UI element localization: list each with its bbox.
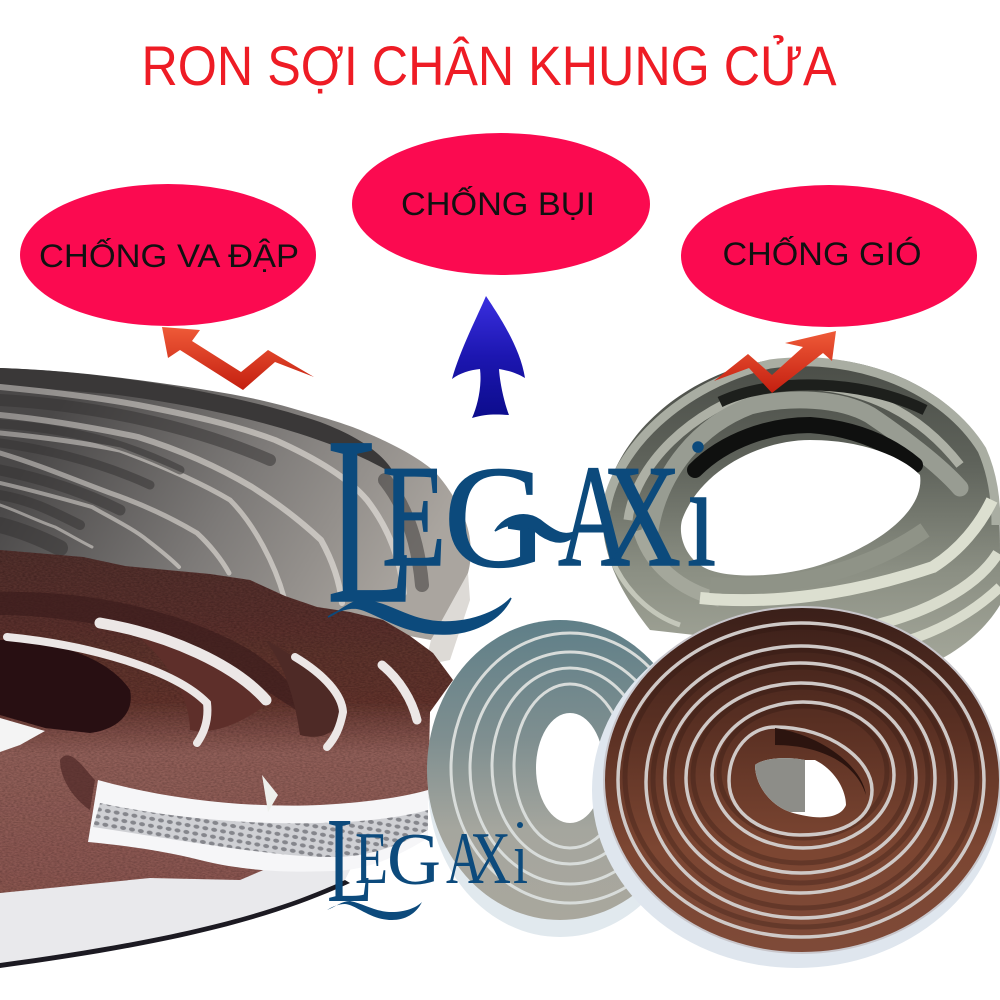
logo: large Legaxi: L xyxy=(327,387,415,653)
arrow: left xyxy=(162,327,314,390)
product: grey coil bottom centre xyxy=(427,620,693,937)
logo: large Legaxi: E xyxy=(382,435,446,597)
product: grey-green coil right xyxy=(603,358,1000,662)
backing strip xyxy=(88,775,428,872)
callout: chống bụi xyxy=(352,133,650,275)
title: RON SỢI CHÂN KHUNG CỬA xyxy=(142,34,837,97)
callout: chống gió: CHỐNG GIÓ xyxy=(722,236,922,272)
logo: small Legaxi: X xyxy=(470,818,511,900)
logo: small Legaxi xyxy=(327,793,528,928)
product: brown coil bottom left xyxy=(0,550,453,968)
arrow: centre up xyxy=(452,296,525,418)
callout: chống va đập xyxy=(20,184,316,326)
logo: large Legaxi: G xyxy=(444,436,548,598)
logo: large Legaxi xyxy=(327,387,716,653)
logo: small Legaxi: E xyxy=(355,818,388,900)
callout: chống va đập: CHỐNG VA ĐẬP xyxy=(39,238,299,274)
logo: small Legaxi: A xyxy=(446,818,483,900)
logo: large Legaxi: A xyxy=(558,435,630,597)
white tape gaps xyxy=(7,623,417,747)
logo: small Legaxi: L xyxy=(327,793,373,928)
logo: small Legaxi: G xyxy=(387,819,441,901)
logo: large Legaxi: ı xyxy=(687,435,716,597)
callout: chống gió xyxy=(681,185,977,327)
logo: large Legaxi: X xyxy=(603,435,681,597)
callout: chống bụi: CHỐNG BỤI xyxy=(401,186,595,222)
product: brown coil bottom right xyxy=(592,607,1000,968)
arrow: right xyxy=(714,331,836,393)
product: grey coil top left xyxy=(0,368,471,665)
logo: small Legaxi: ı xyxy=(513,818,528,900)
